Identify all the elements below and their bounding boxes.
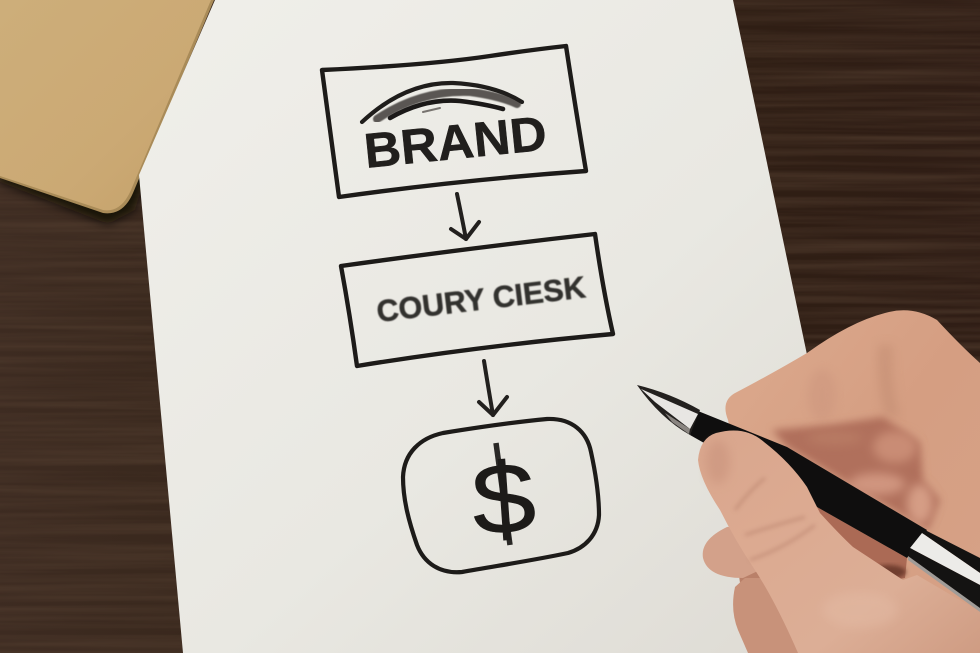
text: BRAND: BRAND [362,107,549,179]
flowchart box: dollar [403,419,599,572]
manila card [0,0,214,224]
white paper sheet [139,0,870,653]
index finger mid shading [808,369,836,421]
pen [637,385,980,612]
text: COURY CIESK: COURY CIESK [375,269,588,329]
logo swoosh [362,83,522,122]
finger gap patch [738,568,795,605]
arrow: brand to middle box [451,194,479,239]
thumb [698,430,980,653]
flowchart box: COURY CIESK [341,234,613,366]
pen metal tip [637,385,700,435]
knuckle shading [878,345,900,418]
index finger and back of hand [725,310,980,653]
dollar stem [496,443,510,545]
thumb nail shading [706,440,730,484]
flowchart box: BRAND [322,46,586,197]
deep shadow [870,565,906,579]
pen metal grip band [922,530,980,573]
pen barrel [690,411,927,558]
thumb base highlight [822,592,898,628]
thumb creases [735,478,815,560]
shadow under pen [817,507,907,582]
arrow: middle box to dollar box [479,361,507,415]
ring finger [703,525,760,578]
inner finger highlights [807,431,933,524]
palm shadow between fingers [772,417,940,530]
dollar sign: $ [468,441,539,557]
little finger [733,578,812,653]
hand holding pen [637,310,980,653]
